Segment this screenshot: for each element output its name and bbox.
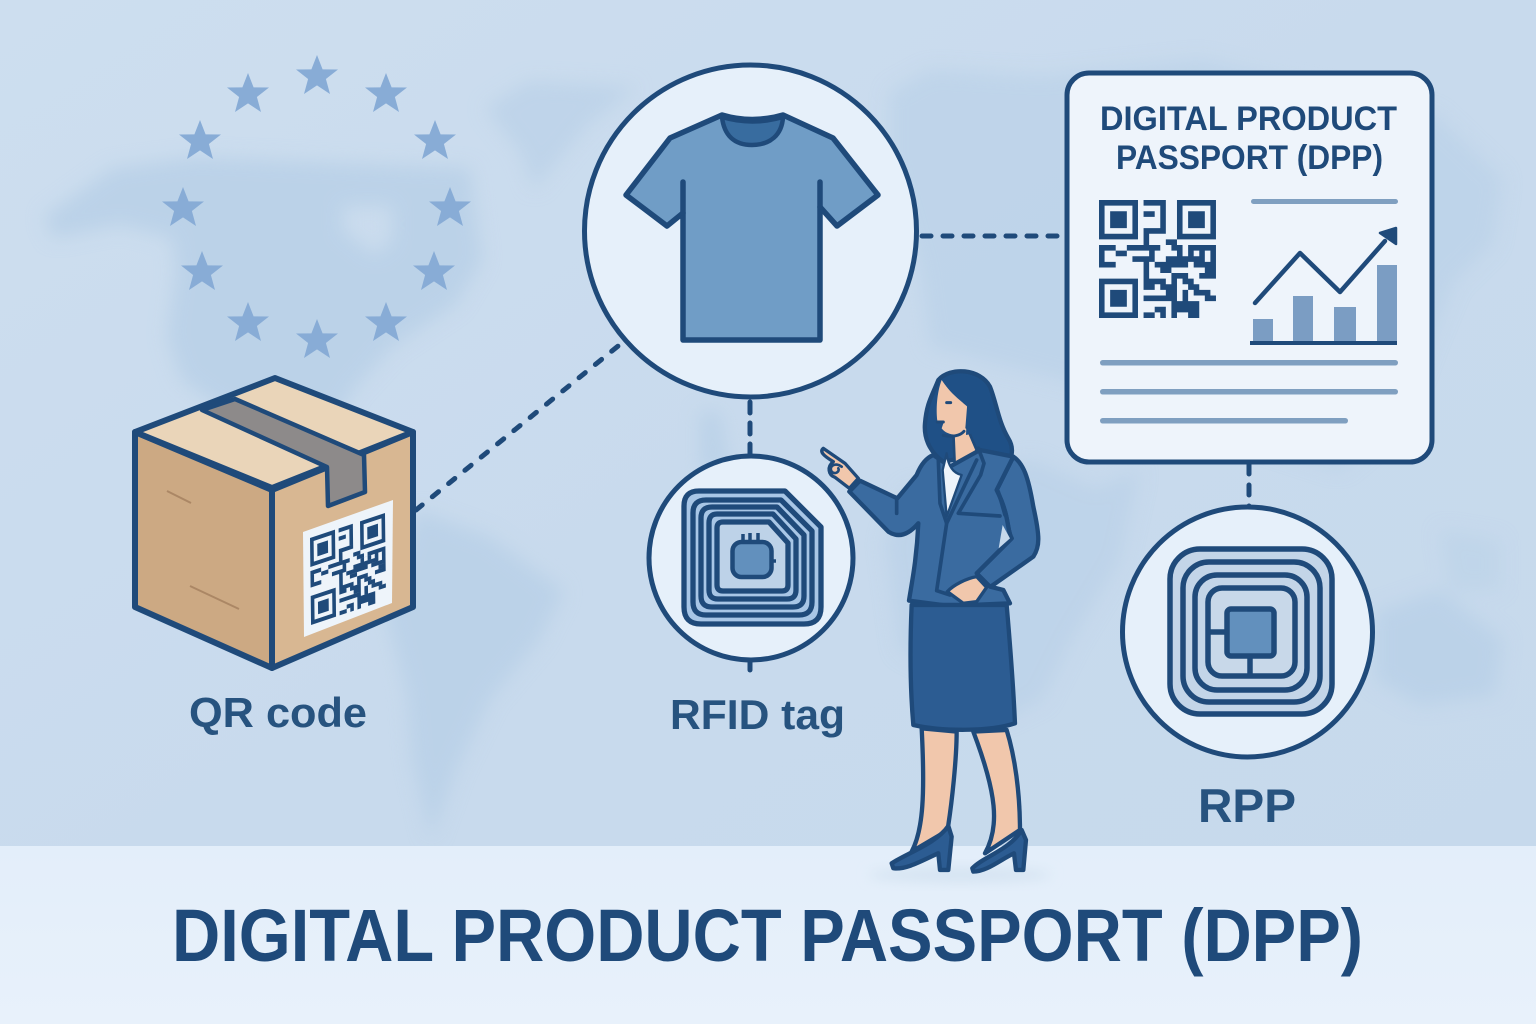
shirt collar bbox=[722, 117, 783, 145]
chart top rule bbox=[1251, 199, 1398, 204]
circle bbox=[1122, 507, 1372, 757]
RPP chip leads bbox=[1208, 632, 1250, 676]
face bbox=[937, 380, 967, 435]
hair back bbox=[925, 371, 1012, 462]
lapel inner bbox=[947, 460, 977, 523]
skirt bbox=[911, 605, 1015, 730]
left shoe bbox=[892, 826, 952, 870]
RFID chip bbox=[732, 533, 776, 577]
jacket right sleeve bbox=[977, 457, 1038, 588]
right leg bbox=[973, 730, 1020, 853]
bar chart bbox=[1253, 265, 1397, 343]
box scuff marks bbox=[167, 491, 239, 609]
jacket body and left arm bbox=[849, 450, 1013, 606]
dashed connectors bbox=[416, 236, 1249, 670]
circle bbox=[584, 65, 916, 397]
chart baseline bbox=[1250, 341, 1397, 345]
world map bbox=[44, 60, 1503, 840]
panel: RPP circle bbox=[1122, 507, 1372, 757]
panel: t-shirt circle bbox=[584, 65, 916, 397]
label: RPP: RPP bbox=[1198, 779, 1296, 832]
finger curl bbox=[831, 465, 842, 473]
box top face bbox=[135, 378, 413, 488]
trend line bbox=[1255, 241, 1385, 303]
packing tape bbox=[202, 399, 365, 506]
sleeve seams bbox=[683, 182, 820, 213]
right shoe bbox=[972, 830, 1026, 872]
box right face bbox=[272, 432, 413, 668]
text lines bbox=[1100, 360, 1398, 424]
ground band bbox=[0, 846, 1536, 1024]
RPP chip bbox=[1227, 609, 1274, 656]
card QR code bbox=[1099, 200, 1216, 318]
pointing hand bbox=[822, 448, 858, 488]
box left face bbox=[135, 432, 272, 668]
RFID antenna bbox=[684, 491, 821, 624]
QR label bbox=[303, 500, 393, 637]
ground shadow bbox=[868, 867, 1052, 883]
left leg bbox=[912, 728, 957, 852]
neck bbox=[953, 427, 977, 472]
RPP antenna bbox=[1170, 549, 1332, 714]
card heading line 2: PASSPORT (DPP) bbox=[1116, 139, 1383, 177]
card bbox=[1067, 73, 1432, 462]
lower hand bbox=[947, 577, 987, 603]
panel: passport card bbox=[1067, 73, 1432, 462]
panel: cardboard box with QR code bbox=[135, 378, 413, 668]
label: QR code: QR code bbox=[189, 689, 367, 736]
lapel bbox=[897, 448, 1005, 595]
QR code on box bbox=[310, 513, 386, 625]
t-shirt bbox=[626, 115, 878, 340]
main title: DIGITAL PRODUCT PASSPORT (DPP) bbox=[172, 894, 1363, 977]
white blouse bbox=[943, 453, 962, 517]
label: RFID tag: RFID tag bbox=[670, 691, 845, 738]
trend arrowhead bbox=[1380, 228, 1396, 244]
circle bbox=[649, 456, 853, 660]
card heading: DIGITAL PRODUCT bbox=[1100, 100, 1397, 138]
figure: woman presenting bbox=[822, 371, 1038, 872]
eye and mouth bbox=[937, 403, 964, 436]
hair front bbox=[942, 375, 990, 435]
gap between arm and waist bbox=[999, 525, 1010, 548]
panel: RFID tag circle bbox=[649, 456, 853, 660]
EU stars bbox=[162, 55, 471, 358]
